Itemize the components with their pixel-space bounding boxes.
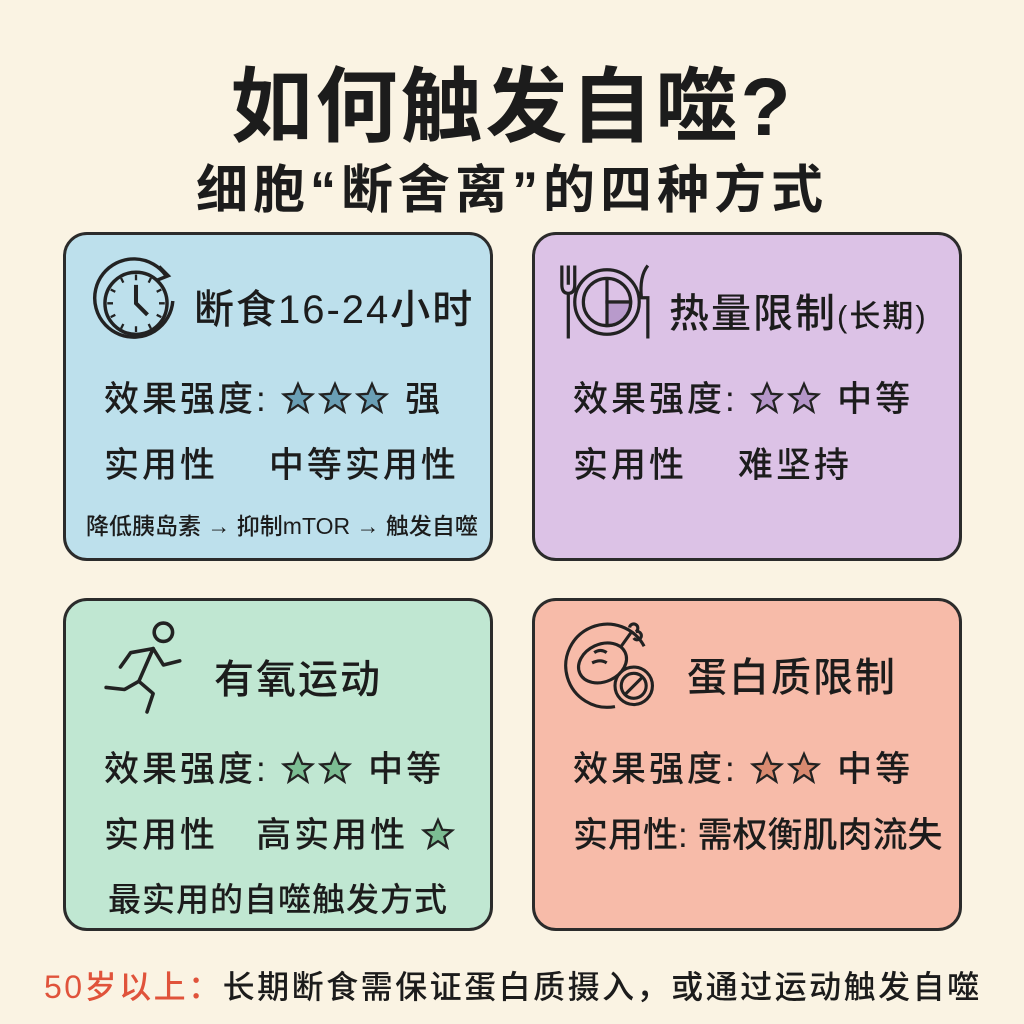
- effect line: 效果强度: 中等: [573, 380, 913, 419]
- panel: calorie restriction: [532, 232, 962, 561]
- effect line: 效果强度: 强: [104, 380, 443, 419]
- icon: plate: [560, 264, 650, 338]
- icon: runner: [104, 621, 182, 714]
- icon: meat with no sign: [564, 622, 654, 709]
- heading: 有氧运动: [214, 658, 382, 702]
- subtitle: 细胞“断舍离”的四种方式: [196, 162, 828, 220]
- title: 如何触发自噬?: [230, 62, 794, 153]
- footer note: 50岁以上：长期断食需保证蛋白质摄入，或通过运动触发自噬: [44, 969, 982, 1005]
- icon: clock: [92, 257, 174, 339]
- note: 最实用的自噬触发方式: [108, 881, 448, 918]
- panel: aerobic exercise: [63, 598, 493, 931]
- heading: 热量限制(长期): [669, 292, 928, 336]
- effect line: 效果强度: 中等: [104, 750, 444, 789]
- effect line: 效果强度: 中等: [573, 750, 913, 789]
- heading: 蛋白质限制: [687, 656, 897, 700]
- practicality line: 实用性 高实用性: [104, 816, 408, 855]
- panel: fasting: [63, 232, 493, 561]
- practicality line: 实用性 难坚持: [573, 446, 852, 485]
- panel: protein restriction: [532, 598, 962, 931]
- practicality line: 实用性: 需权衡肌肉流失: [573, 816, 942, 855]
- practicality line: 实用性 中等实用性: [104, 446, 459, 485]
- heading: 断食16-24小时: [194, 288, 474, 332]
- mechanism note: 降低胰岛素 → 抑制mTOR → 触发自噬: [86, 513, 478, 539]
